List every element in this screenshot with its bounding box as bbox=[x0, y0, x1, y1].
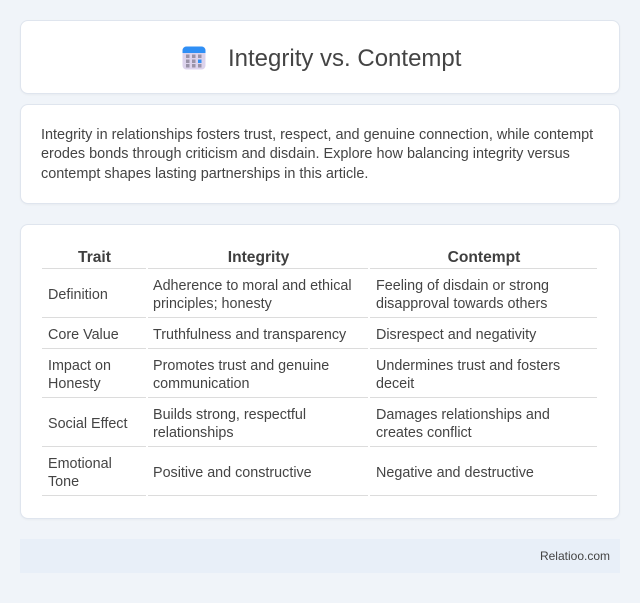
table row: impact on honesty: deceit bbox=[376, 376, 414, 392]
title: Integrity vs. Contempt bbox=[228, 45, 461, 72]
table row: impact on honesty: communication bbox=[153, 376, 249, 392]
table header: Integrity bbox=[228, 249, 289, 266]
table header: Trait bbox=[78, 249, 111, 266]
table row: social effect bbox=[42, 407, 597, 447]
table row: core value bbox=[42, 327, 597, 349]
table row: impact on honesty: Honesty bbox=[48, 376, 101, 392]
table header: Contempt bbox=[448, 249, 520, 266]
footer credit: Relatioo.com bbox=[540, 549, 610, 563]
table row: social effect: creates conflict bbox=[376, 425, 472, 441]
table row: social effect: Damages relationships and bbox=[376, 407, 550, 423]
text block: introduction: erodes bonds through criticism and disdain. Explore how balancing integrity versus bbox=[41, 146, 570, 162]
table row: definition: principles; honesty bbox=[153, 296, 272, 312]
panel: introduction bbox=[20, 104, 620, 204]
table row: emotional tone bbox=[42, 456, 597, 496]
text block: introduction bbox=[41, 127, 594, 182]
table row: core value: Core Value bbox=[48, 327, 119, 343]
table row: impact on honesty: Promotes trust and genuine bbox=[153, 358, 329, 374]
table row: emotional tone: Emotional bbox=[48, 456, 112, 472]
footer bar bbox=[20, 539, 620, 573]
table row: definition bbox=[42, 278, 597, 318]
table row: emotional tone: Negative and destructive bbox=[376, 465, 534, 481]
panel: title card bbox=[20, 20, 620, 94]
table row: definition: disapproval towards others bbox=[376, 296, 547, 312]
table row: definition: Adherence to moral and ethical bbox=[153, 278, 352, 294]
icon: calendar bbox=[182, 46, 206, 70]
table row: social effect: relationships bbox=[153, 425, 234, 441]
table row: emotional tone: Tone bbox=[48, 474, 79, 490]
table row: emotional tone: Positive and constructive bbox=[153, 465, 312, 481]
table row: social effect: Social Effect bbox=[48, 416, 127, 432]
table header bbox=[42, 249, 597, 269]
text block: introduction: Integrity in relationships fosters trust, respect, and genuine connection, while contempt bbox=[41, 127, 593, 143]
table row: social effect: Builds strong, respectful bbox=[153, 407, 306, 423]
table row: impact on honesty: Undermines trust and fosters bbox=[376, 358, 560, 374]
table row: impact on honesty: Impact on bbox=[48, 358, 111, 374]
table row: core value: Disrespect and negativity bbox=[376, 327, 536, 343]
table row: definition: Definition bbox=[48, 287, 108, 303]
table row: impact on honesty bbox=[42, 358, 597, 398]
table row: definition: Feeling of disdain or strong bbox=[376, 278, 549, 294]
panel: comparison table bbox=[20, 224, 620, 519]
text block: introduction: contempt shapes lasting partnerships in this article. bbox=[41, 166, 368, 182]
table row: core value: Truthfulness and transparency bbox=[153, 327, 346, 343]
